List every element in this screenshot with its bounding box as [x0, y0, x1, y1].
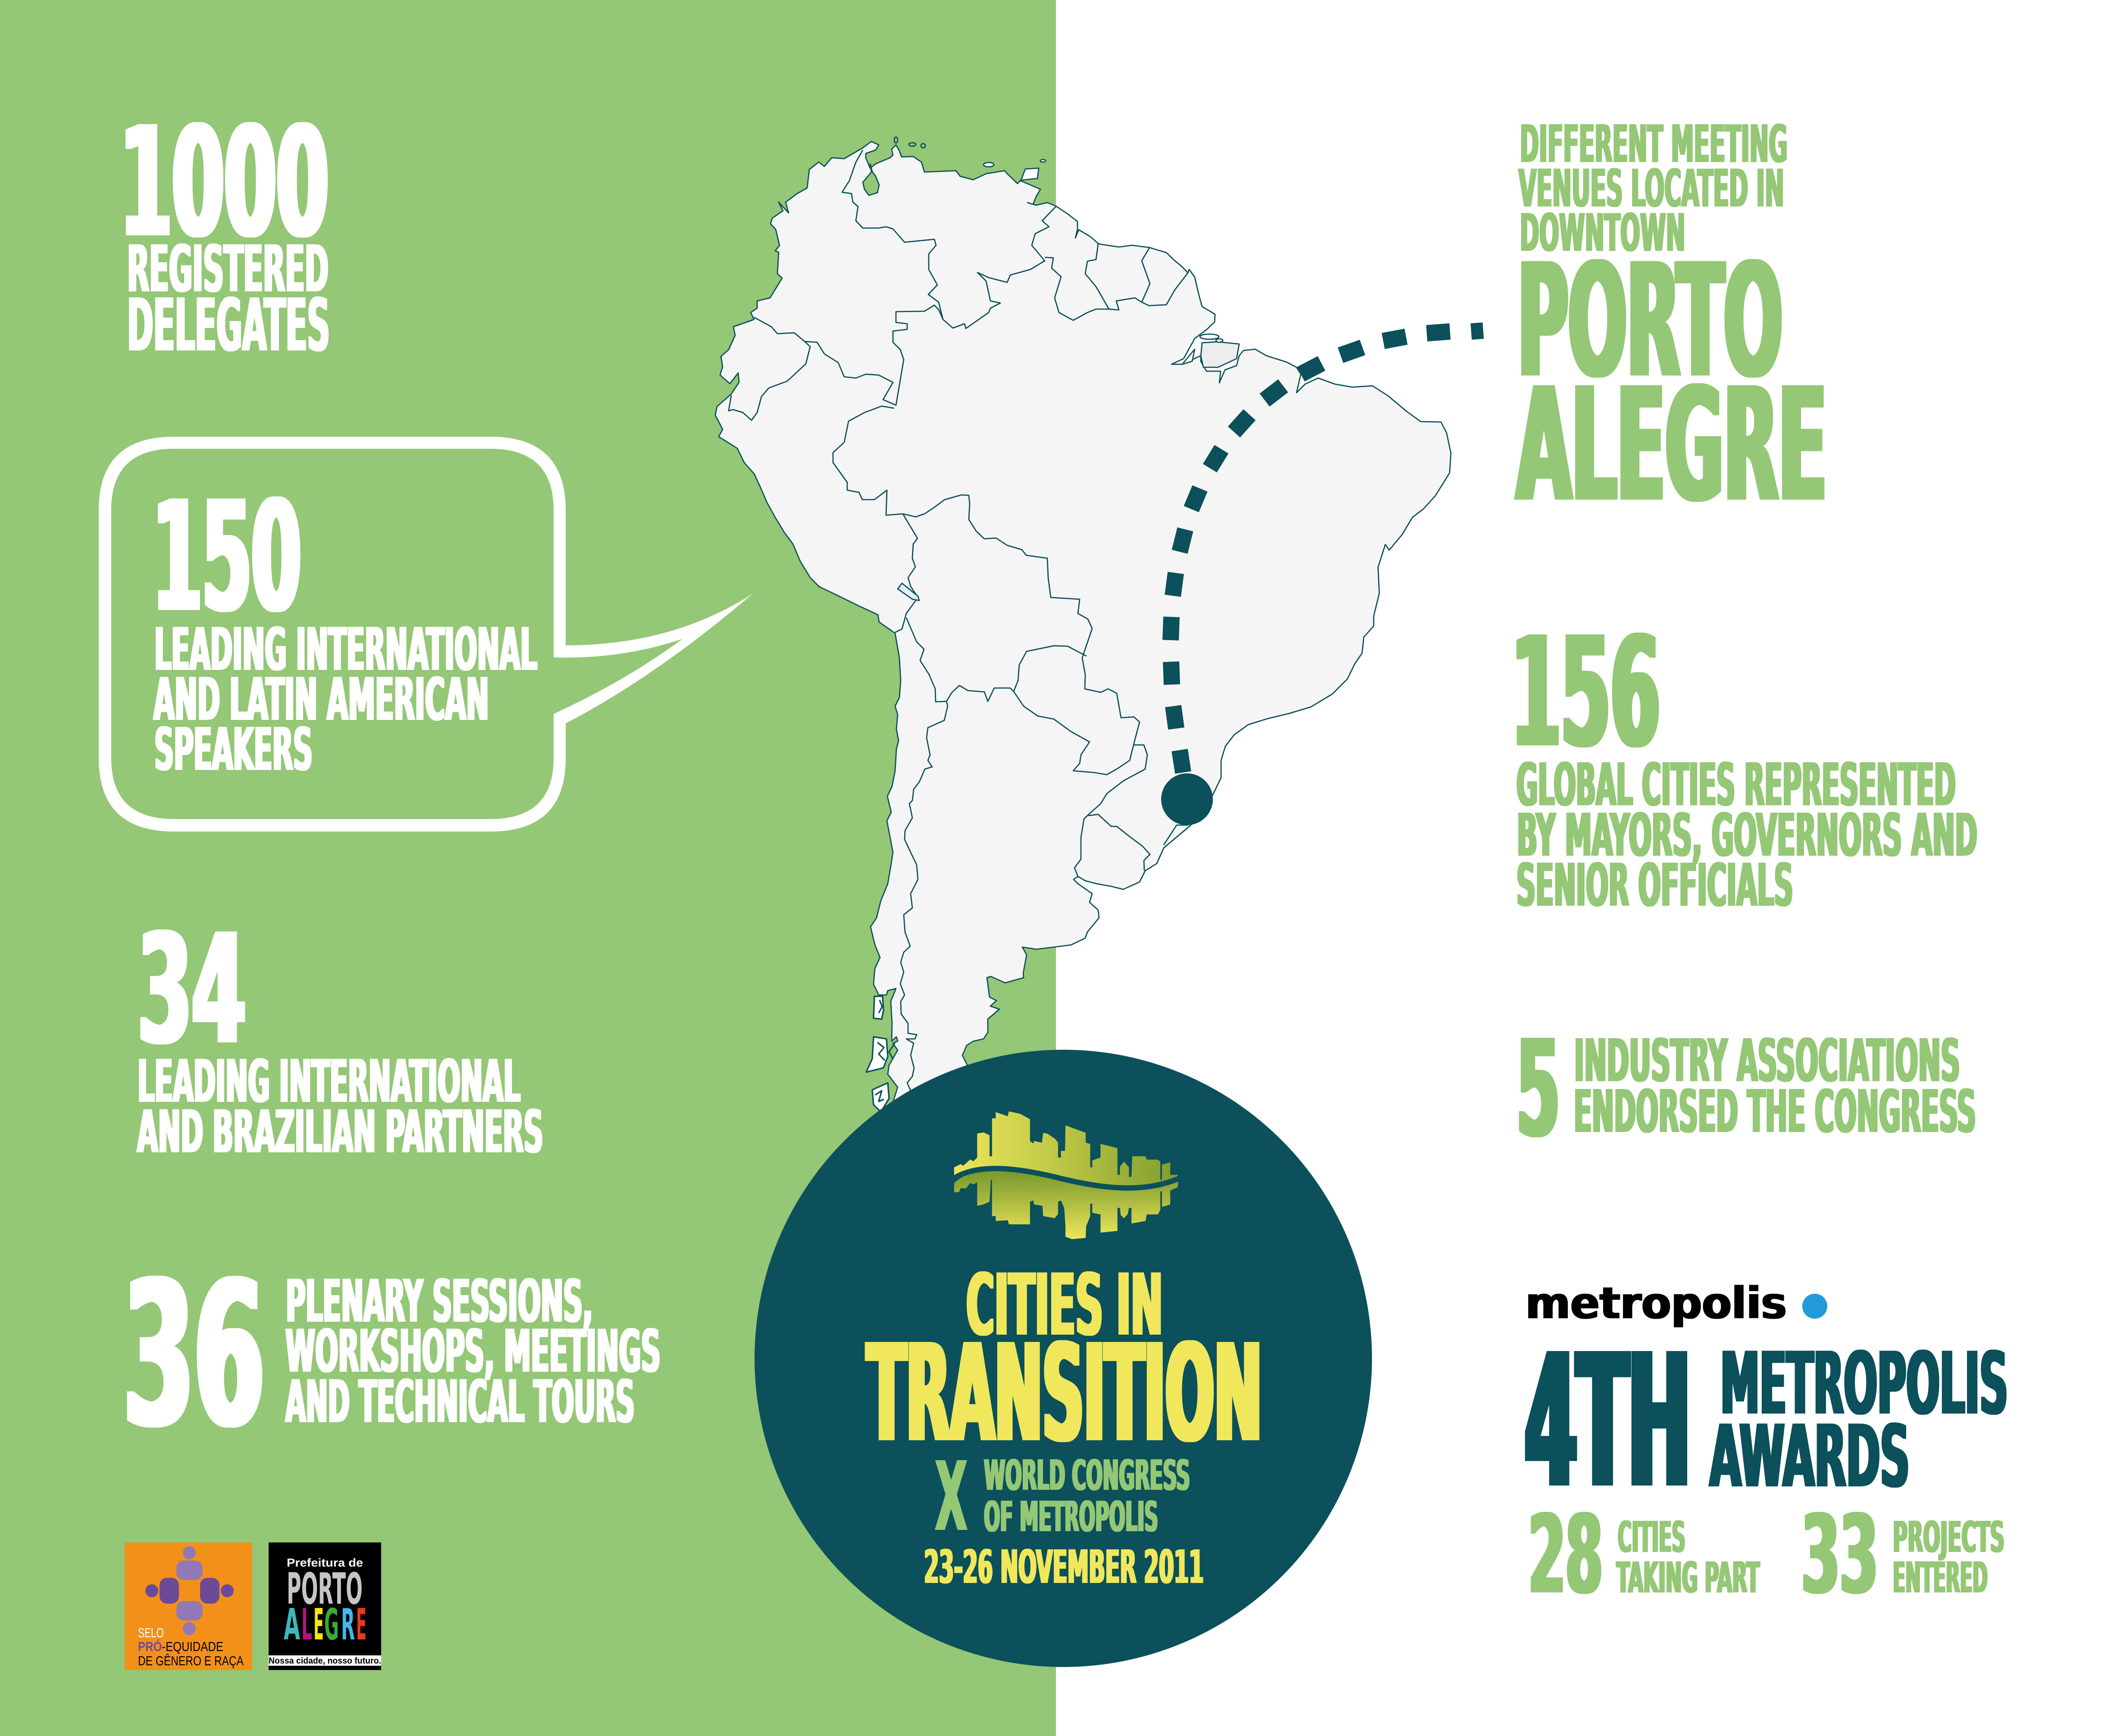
stat: 28 cities taking part [1528, 1492, 1760, 1618]
stat: 156 cities: 156 [1511, 604, 1660, 782]
stat: 5 associations [1517, 1011, 1976, 1167]
heading: venues in Porto Alegre: PORTO [1518, 230, 1782, 413]
dashed route line to Porto Alegre [1171, 331, 1483, 773]
stat: 5 associations: 5 [1517, 1011, 1560, 1167]
text: WORKSHOPS, MEETINGS [285, 1317, 661, 1386]
congress circle: CITIES IN [966, 1255, 1163, 1355]
speech bubble: 150 speakers: SPEAKERS [154, 716, 313, 784]
logo: metropolis: metropolis [1525, 1278, 1787, 1329]
stat: 1000 registered delegates [120, 94, 330, 368]
country borders [729, 150, 1188, 1091]
stat: 36 sessions: PLENARY SESSIONS, [286, 1267, 593, 1336]
congress circle [755, 1050, 1372, 1667]
lake titicaca [898, 583, 919, 601]
stat: 156 cities [1511, 604, 1977, 920]
text: LEADING INTERNATIONAL [138, 1048, 520, 1116]
heading: venues in Porto Alegre: DOWNTOWN [1520, 203, 1685, 263]
congress circle: WORLD CONGRESS [984, 1451, 1190, 1500]
speech bubble: 150 speakers: 150 [153, 468, 301, 646]
logo: selo pro-equidade: DE GÊNERO E RAÇA [138, 1653, 244, 1668]
text: 1000 [120, 94, 329, 272]
speech bubble: 150 speakers: AND LATIN AMERICAN [153, 666, 489, 734]
lake maracaibo [863, 164, 879, 195]
heading: venues in Porto Alegre [1516, 115, 1827, 537]
logo: prefeitura de porto alegre: Nossa cidade, nosso futuro. [269, 1656, 381, 1666]
logo: prefeitura de porto alegre: E [313, 1599, 324, 1650]
speech bubble: 150 speakers: LEADING INTERNATIONAL [154, 616, 537, 684]
congress circle: TRANSITION [867, 1315, 1262, 1472]
chilean archipelago islands [866, 996, 895, 1112]
congress circle: 23-26 NOVEMBER 2011 [924, 1541, 1204, 1594]
text: AND BRAZILIAN PARTNERS [137, 1098, 543, 1167]
congress circle: OF METROPOLIS [984, 1492, 1158, 1541]
logo: prefeitura de porto alegre: L [301, 1599, 312, 1650]
logo: selo pro-equidade [125, 1542, 252, 1670]
logo: prefeitura de porto alegre: E [356, 1599, 366, 1650]
logo: prefeitura de porto alegre: R [341, 1599, 355, 1650]
stat: 33 projects entered: 33 [1801, 1492, 1878, 1618]
text: DELEGATES [127, 283, 330, 368]
stat: 28 cities taking part: CITIES [1618, 1513, 1685, 1562]
marajo island [1201, 342, 1239, 367]
heading: venues in Porto Alegre: VENUES LOCATED IN [1519, 159, 1784, 219]
text: REGISTERED [127, 232, 329, 307]
icon: city skyline logo [952, 1111, 1181, 1239]
caribbean and atlantic islands [894, 137, 1223, 364]
heading: venues in Porto Alegre: DIFFERENT MEETING [1520, 115, 1788, 175]
logo: prefeitura de porto alegre: G [324, 1599, 339, 1650]
congress circle: X [935, 1442, 968, 1553]
map of South America [715, 137, 1451, 1112]
logo: prefeitura de porto alegre: Prefeitura de [287, 1556, 363, 1569]
logo: prefeitura de porto alegre [269, 1542, 381, 1670]
heading: 4th metropolis awards: 4TH [1525, 1314, 1691, 1529]
speech bubble: 150 speakers [99, 437, 753, 832]
location dot [1161, 773, 1213, 825]
logo: prefeitura de porto alegre: A [284, 1599, 300, 1650]
green background panel [0, 0, 1056, 1736]
stat: 36 sessions [124, 1238, 661, 1472]
text: AND TECHNICAL TOURS [285, 1368, 635, 1436]
stat: 36 sessions: 36 [124, 1238, 264, 1472]
stat: 34 partners: 34 [138, 901, 246, 1079]
stat: 33 projects entered: ENTERED [1893, 1553, 1988, 1603]
stat: 34 partners [137, 901, 543, 1167]
logo: selo pro-equidade: SELO [138, 1625, 164, 1640]
logo: selo pro-equidade: PRÓ-EQUIDADE [138, 1639, 223, 1654]
stat: 28 cities taking part: 28 [1528, 1492, 1603, 1618]
text: TAKING PART [1616, 1553, 1760, 1603]
logo: prefeitura de porto alegre: PORTO [287, 1564, 363, 1614]
